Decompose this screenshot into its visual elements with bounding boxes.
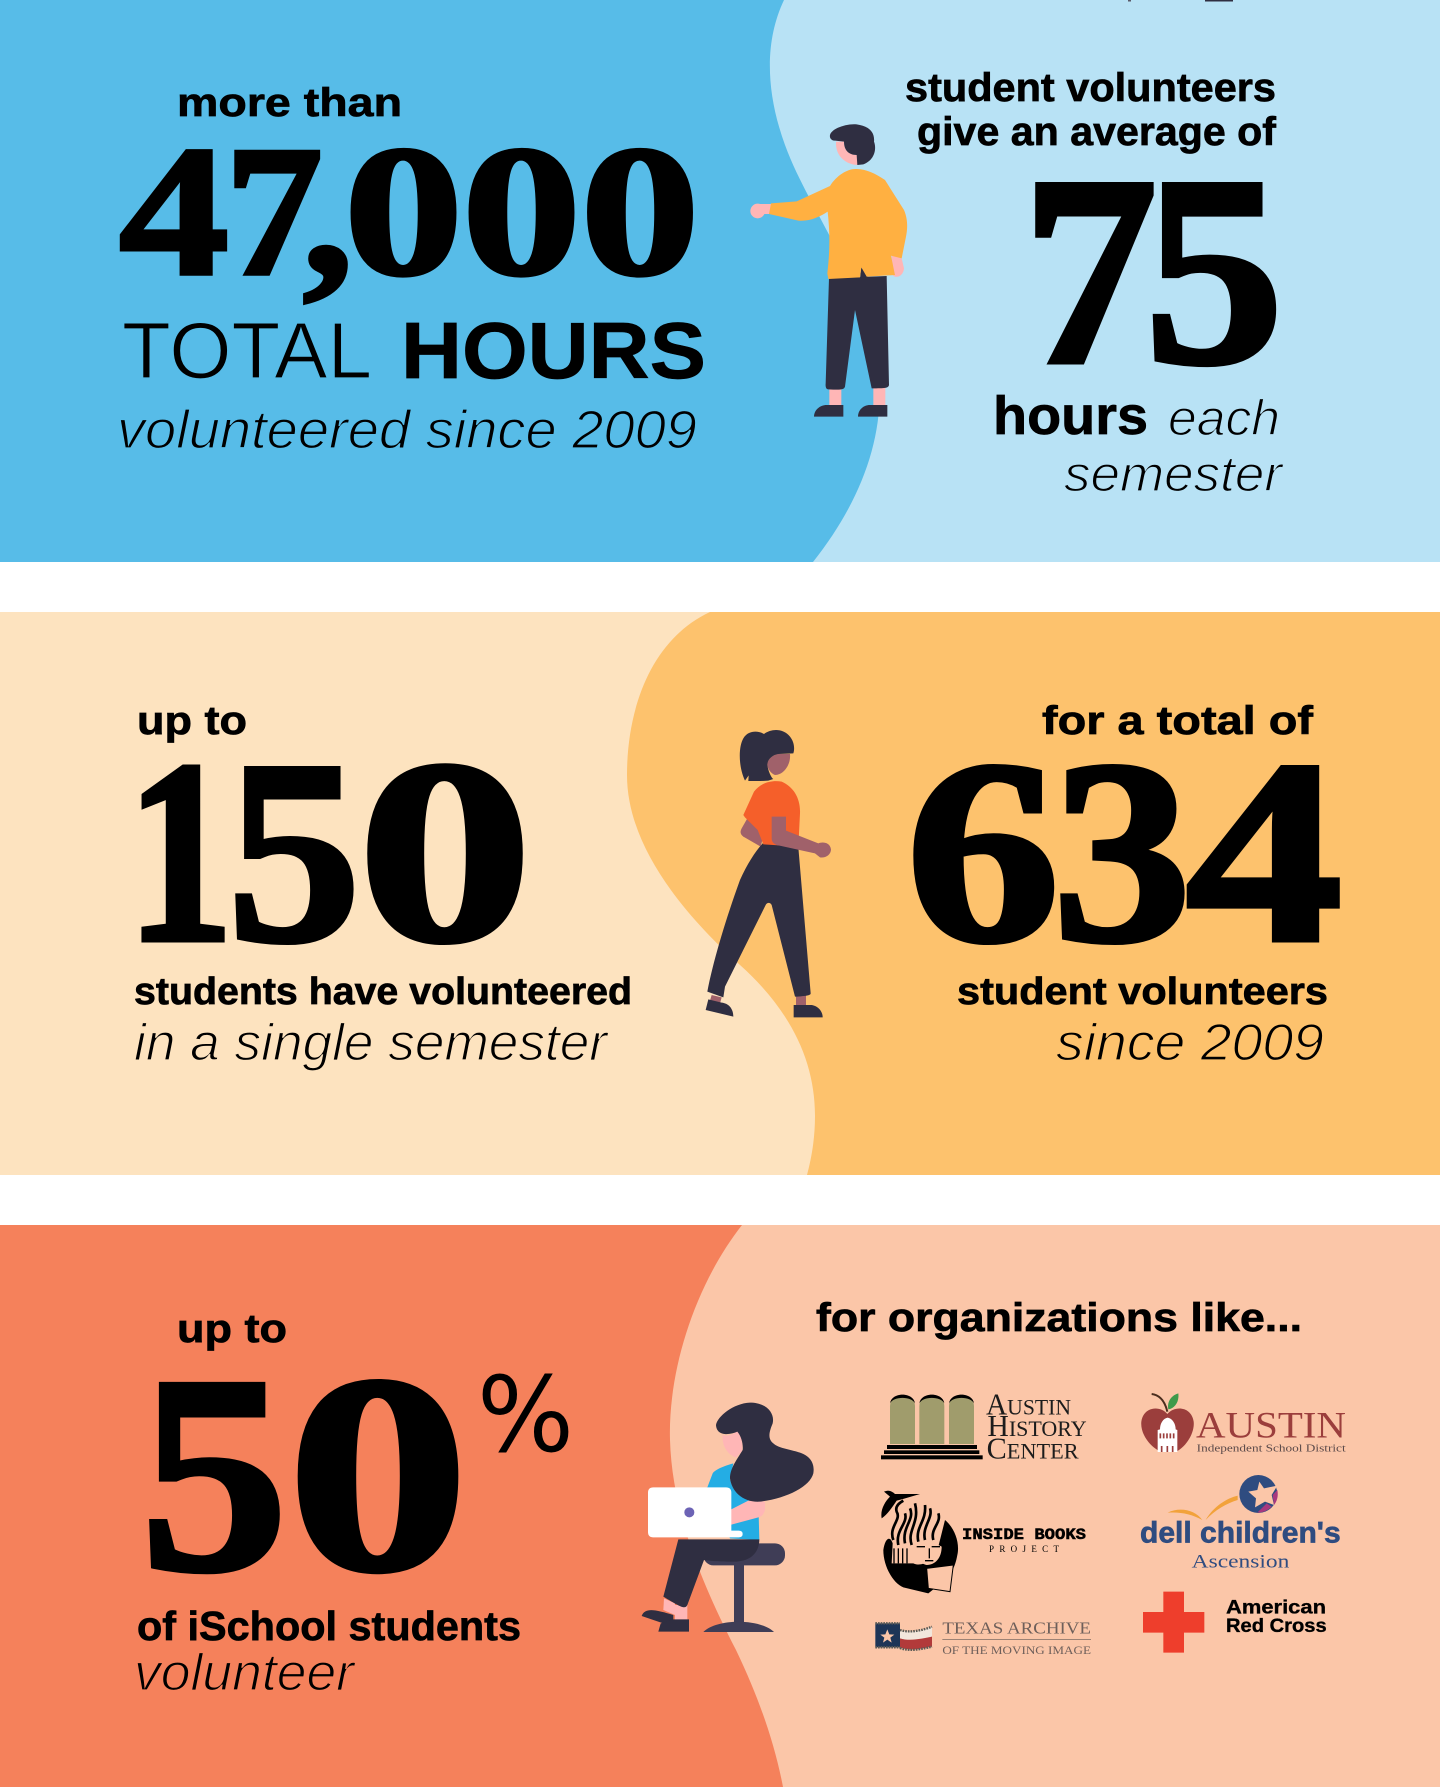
number: 634: 4 — [1185, 706, 1343, 997]
panel: percentage and organizations — [0, 1225, 1440, 1787]
panel: student counts — [0, 612, 1440, 1175]
logo: American Red Cross: American — [1226, 1597, 1326, 1618]
number: 75: 7 — [1022, 121, 1158, 421]
logo: Austin History Center — [881, 1387, 1087, 1465]
text: hours bold: HOURS — [401, 306, 706, 395]
logo: Inside Books Project — [881, 1491, 1086, 1593]
heading: up to: up to — [137, 699, 247, 743]
logo: Texas Archive of the Moving Image — [875, 1618, 1091, 1657]
icon: woman with laptop on stool — [642, 1403, 814, 1632]
number: 150: 5 — [227, 707, 361, 997]
heading: up to: up to — [177, 1307, 287, 1351]
text: hours each semester: each — [1168, 390, 1280, 446]
heading: for organizations like: for organizations like... — [816, 1296, 1302, 1340]
text: volunteer: volunteer — [134, 1644, 357, 1702]
number: 634 — [906, 706, 1343, 997]
panel: total hours — [0, 0, 1440, 562]
heading: student volunteers give an average of: give an average of — [917, 110, 1277, 154]
heading: more than: more than — [177, 81, 402, 125]
logo: Inside Books Project: INSIDE BOOKS — [962, 1526, 1086, 1544]
logo: Austin Independent School District — [1141, 1393, 1346, 1455]
number: 47,000: 0 — [462, 109, 581, 315]
number: 47,000: 7 — [225, 108, 323, 315]
number: 47,000: 0 — [344, 109, 463, 315]
text: of iSchool students: of iSchool students — [137, 1603, 521, 1649]
number: 75 — [1022, 121, 1284, 421]
logo: American Red Cross: Red Cross — [1226, 1616, 1327, 1637]
number: 150 — [126, 707, 533, 998]
logo: Austin Independent School District: AUSTIN — [1196, 1406, 1346, 1447]
number: 47,000 — [119, 108, 700, 315]
number: 50 — [140, 1317, 469, 1631]
number: 47,000: 4 — [119, 109, 229, 315]
logo: Austin Independent School District: Independent School District — [1197, 1444, 1346, 1455]
text: in a single semester: in a single semester — [134, 1014, 610, 1072]
number: 50: 5 — [140, 1317, 288, 1630]
heading: for a total of: for a total of — [1042, 699, 1314, 743]
logo: Austin History Center: HISTORY — [987, 1409, 1087, 1443]
text: hours each semester: hours — [993, 386, 1148, 446]
logo: Texas Archive of the Moving Image: OF THE MOVING IMAGE — [942, 1645, 1091, 1657]
text: student volunteers: student volunteers — [957, 971, 1328, 1013]
text: hours each semester: semester — [1064, 446, 1284, 502]
text: students have volunteered: students have volunteered — [134, 971, 632, 1013]
icon: walking woman — [706, 730, 831, 1017]
number: 634: 6 — [906, 707, 1060, 997]
heading: student volunteers give an average of: student volunteers — [905, 66, 1276, 110]
number: 50: 0 — [287, 1319, 469, 1631]
logo: Dell Children's Ascension: Ascension — [1192, 1551, 1290, 1572]
number: 150: 1 — [126, 707, 234, 997]
text: total hours: TOTAL — [122, 306, 372, 395]
text: hours each semester — [993, 386, 1284, 502]
logo: Austin History Center: CENTER — [987, 1431, 1080, 1465]
logo: Dell Children's Ascension: dell children's — [1140, 1517, 1341, 1550]
logo: Texas Archive of the Moving Image: TEXAS ARCHIVE — [942, 1618, 1091, 1637]
text: volunteered since 2009: volunteered since 2009 — [117, 400, 697, 460]
number: 634: 3 — [1053, 707, 1191, 997]
number: 75: 5 — [1144, 121, 1284, 421]
number: 47,000: 0 — [580, 109, 700, 315]
symbol: percent: % — [477, 1354, 574, 1476]
heading: student volunteers give an average of — [905, 66, 1277, 154]
logo: Austin History Center: AUSTIN — [986, 1387, 1071, 1421]
logo: American Red Cross — [1143, 1592, 1327, 1653]
number: 47,000: , — [302, 108, 354, 315]
logo: Dell Children's Ascension — [1140, 1475, 1341, 1572]
text: since 2009: since 2009 — [1056, 1014, 1324, 1072]
number: 150: 0 — [357, 707, 533, 998]
icon: standing man pointing — [750, 124, 907, 417]
logo: Inside Books Project: PROJECT — [989, 1544, 1060, 1554]
